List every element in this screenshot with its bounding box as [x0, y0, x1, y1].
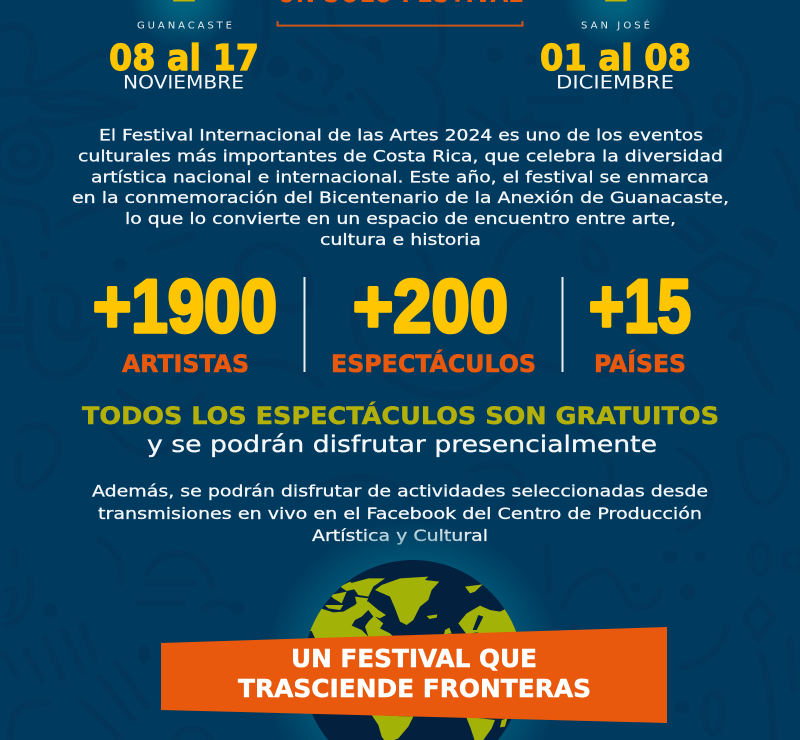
icon: globe: [303, 560, 523, 740]
paragraph: streaming: [92, 482, 708, 545]
intro paragraph: lo que lo convierte en un espacio de encuentro entre arte,: [125, 209, 676, 228]
stat: artistas: [93, 264, 277, 378]
top decorative glow right: [557, 0, 675, 50]
headline: free shows: TODOS LOS ESPECTÁCULOS SON GRATUITOS: [82, 401, 719, 430]
icon: cropped yellow ornament left: [173, 0, 195, 2]
banner: TRASCIENDE FRONTERAS: [238, 674, 591, 703]
Iceland and Svalbard: [427, 584, 483, 619]
Hudson Bay and Baltic: [305, 610, 483, 638]
paragraph: streaming: Además, se podrán disfrutar de actividades seleccionadas desde: [92, 482, 708, 500]
intro paragraph: culturales más importantes de Costa Rica, que celebra la diversidad: [78, 146, 723, 166]
icon: cropped yellow ornament right: [605, 0, 627, 2]
British Isles: [444, 628, 452, 634]
paragraph: streaming: Artística y Cultural: [312, 526, 488, 545]
date block: San José: 01 al 08: [540, 38, 691, 79]
banner: [161, 627, 667, 723]
paragraph: streaming: transmisiones en vivo en el Facebook del Centro de Producción: [98, 504, 702, 523]
intro paragraph: en la conmemoración del Bicentenario de la Anexión de Guanacaste,: [72, 188, 729, 207]
bracket under title: [278, 21, 522, 26]
intro paragraph: [72, 126, 729, 249]
North America: [305, 600, 395, 638]
stat: países: +15: [589, 264, 691, 348]
stat: espectáculos: ESPECTÁCULOS: [331, 349, 536, 378]
date block: Guanacaste: 08 al 17: [109, 38, 259, 79]
divider: [562, 277, 564, 372]
date block: Guanacaste: GUANACASTE: [137, 20, 232, 32]
top decorative glow left: [125, 0, 243, 50]
Arctic islands: [325, 578, 385, 610]
subheadline: y se podrán disfrutar presencialmente: [147, 432, 657, 458]
divider: [304, 277, 306, 372]
intro paragraph: cultura e historia: [320, 230, 481, 249]
stat: artistas: +1900: [93, 264, 277, 348]
Europe: [458, 606, 516, 634]
date block: San José: [540, 18, 691, 94]
date block: San José: SAN JOSÉ: [581, 18, 650, 32]
date block: Guanacaste: NOVIEMBRE: [123, 72, 244, 94]
stat: espectáculos: +200: [353, 264, 508, 348]
Africa: [466, 717, 495, 740]
date block: San José: DICIEMBRE: [556, 72, 674, 94]
intro paragraph: artística nacional e internacional. Este año, el festival se enmarca: [91, 167, 709, 186]
stat: países: [589, 264, 691, 378]
stat: países: PAÍSES: [594, 349, 686, 378]
intro paragraph: El Festival Internacional de las Artes 2024 es uno de los eventos: [99, 126, 703, 144]
globe glow: [263, 520, 563, 740]
stat: artistas: ARTISTAS: [122, 350, 249, 378]
South America: [372, 715, 413, 740]
banner: UN FESTIVAL QUE: [291, 644, 537, 673]
stat: espectáculos: [331, 264, 536, 378]
date block: Guanacaste: [109, 20, 259, 94]
Greenland: [375, 577, 439, 625]
